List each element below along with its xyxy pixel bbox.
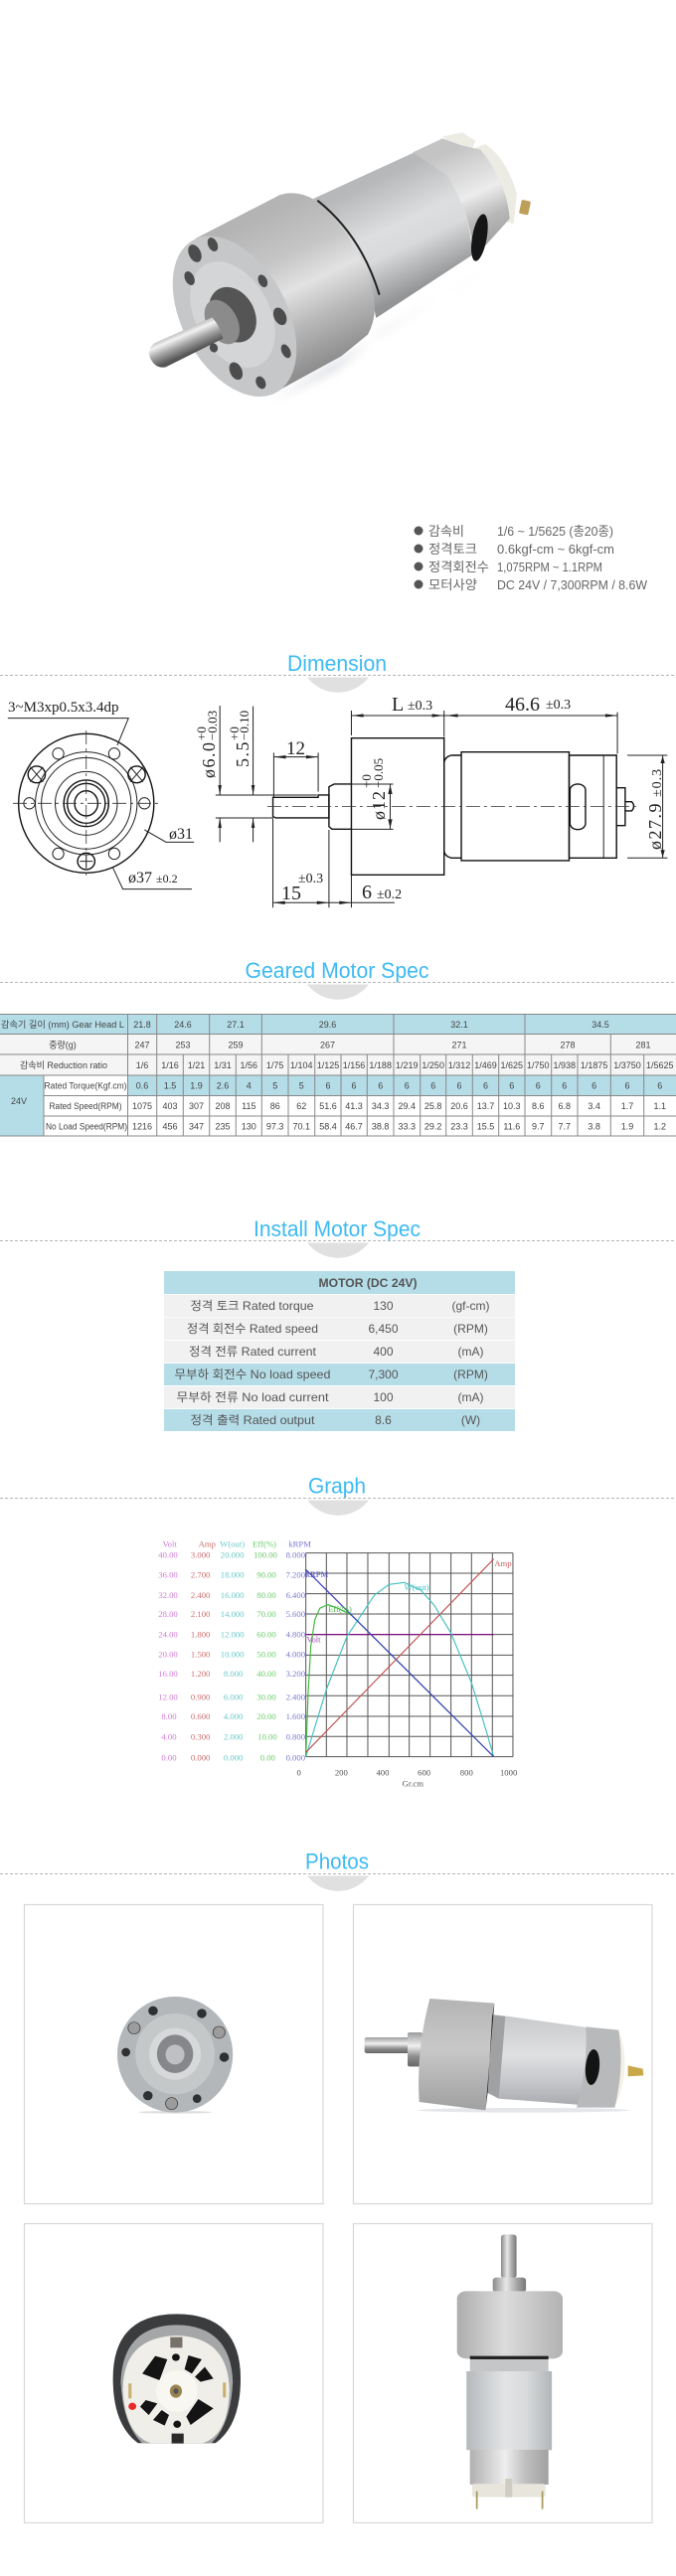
motor rear section	[413, 138, 510, 258]
row: rated torque: 6	[536, 1081, 541, 1091]
hero photo: geared motor	[147, 132, 531, 417]
front view labels	[8, 700, 193, 886]
row: reduction ratio: 1/188	[369, 1060, 392, 1070]
row: rated torque: 6	[657, 1081, 662, 1091]
axis column: Amp: 1.500	[191, 1649, 210, 1659]
curve labels: kRPM	[306, 1569, 329, 1579]
gearbox front face	[147, 215, 322, 417]
x axis labels: 200	[335, 1768, 348, 1778]
row: no load speed: 7.7	[559, 1121, 571, 1131]
side view labels	[194, 694, 665, 904]
row: no load speed: 38.8	[372, 1121, 389, 1131]
row: no load speed: 235	[215, 1121, 231, 1131]
row: reduction ratio: 1/104	[290, 1060, 313, 1070]
geared motor spec table	[0, 1014, 676, 1136]
feature labels: 모터사양	[428, 577, 477, 592]
row: rated speed: 403	[162, 1101, 178, 1111]
row: rated speed: 정격 회전수 Rated speed	[187, 1322, 318, 1336]
photo panel: vertical view	[354, 2224, 652, 2522]
curve labels: Volt	[306, 1634, 321, 1644]
row: weight: 271	[451, 1040, 467, 1049]
side view labels: ø27.9	[645, 802, 665, 850]
row: reduction ratio: 1/16	[161, 1060, 179, 1070]
plot grid	[306, 1553, 513, 1757]
row: no load current: 무부하 전류 No load current	[177, 1390, 329, 1404]
row: weight	[49, 1040, 651, 1049]
row: weight: 247	[134, 1040, 150, 1049]
motor side photo	[365, 1999, 643, 2113]
side view labels: +0	[359, 774, 374, 788]
dimension drawing: front view	[8, 700, 194, 889]
row: weight: 278	[560, 1040, 576, 1049]
row: no load speed: 58.4	[319, 1121, 337, 1131]
row: rated torque: 0.6	[136, 1081, 148, 1091]
gearbox cylinder	[196, 193, 375, 395]
row: no load speed: 29.2	[424, 1121, 441, 1131]
photo panel: rear view	[24, 2224, 323, 2522]
section heading: Photos: Photos	[305, 1849, 369, 1874]
feature values: DC 24V / 7,300RPM / 8.6W	[497, 577, 648, 592]
row: rated speed: 1075	[132, 1101, 152, 1111]
table grid	[0, 1014, 676, 1136]
row: reduction ratio: 1/625	[501, 1060, 523, 1070]
install motor spec table	[164, 1271, 515, 1431]
axis column: W(out): 16.000	[221, 1590, 245, 1600]
row: weight: 중량(g)	[49, 1040, 77, 1049]
axis column: Volt: 12.00	[158, 1692, 178, 1702]
axis column: Eff: Eff(%)	[253, 1539, 276, 1549]
row: gear head length: 29.6	[319, 1020, 336, 1030]
row: rated speed: 3.4	[588, 1101, 600, 1111]
axis column: Eff: 40.00	[256, 1669, 276, 1679]
row: gear head length	[1, 1019, 609, 1030]
axis column: Volt	[158, 1539, 178, 1762]
table header row	[164, 1271, 515, 1294]
curve labels: Amp	[494, 1558, 512, 1568]
axis column: Volt: 40.00	[158, 1550, 178, 1560]
row: no load speed: 15.5	[477, 1121, 494, 1131]
axis column: Volt: Volt	[163, 1539, 177, 1549]
front view labels: ø37 ±0.2	[128, 870, 178, 886]
axis column: Volt: 0.00	[161, 1752, 177, 1762]
collar	[197, 294, 247, 350]
row: rated speed: 307	[189, 1101, 204, 1111]
row: gear head length: 감속기 길이 (mm) Gear Head L	[1, 1019, 124, 1030]
row: rated torque: 5	[272, 1081, 277, 1091]
row: rated speed: 25.8	[424, 1101, 441, 1111]
row: rated torque: 6	[483, 1081, 488, 1091]
curve: Volt	[306, 1633, 494, 1636]
row: gear head length: 32.1	[450, 1020, 468, 1030]
side view labels: +0	[227, 726, 242, 740]
side view labels: +0	[194, 726, 209, 740]
section heading: Dimension: Dimension	[287, 651, 387, 676]
axis column: Eff: 60.00	[256, 1629, 276, 1639]
row: no load speed: 23.3	[450, 1121, 468, 1131]
curve labels: Eff(%)	[328, 1604, 352, 1614]
voltage cell: 24V	[11, 1096, 27, 1106]
row: no load speed: 1.2	[654, 1121, 666, 1131]
side view labels: 12	[286, 738, 305, 759]
front view labels: 3~M3xp0.5x3.4dp	[8, 700, 118, 716]
axis column: Amp: Amp	[199, 1539, 216, 1549]
row: no load speed: 3.8	[588, 1121, 600, 1131]
row: reduction ratio: 1/219	[396, 1060, 419, 1070]
axis column: Eff: 10.00	[257, 1731, 277, 1741]
row: no load speed: No Load Speed(RPM)	[46, 1121, 127, 1131]
bullets	[414, 527, 423, 588]
row: reduction ratio	[20, 1059, 674, 1070]
axis column: W(out): 20.000	[221, 1550, 245, 1560]
feature values	[497, 524, 648, 592]
face raised ring	[173, 246, 292, 383]
row: rated torque: (gf-cm)	[451, 1299, 489, 1313]
axis column: W(out): 14.000	[221, 1609, 245, 1619]
side view labels: −0.10	[237, 711, 252, 740]
row: rated torque: 6	[351, 1081, 357, 1091]
side view labels: L	[392, 694, 404, 716]
row: no load speed: 97.3	[266, 1121, 283, 1131]
x axis labels: Gr.cm	[403, 1778, 423, 1788]
axis column: kRPM: 5.600	[286, 1609, 305, 1619]
row: rated torque: 6	[405, 1081, 410, 1091]
row: weight: 253	[175, 1040, 191, 1049]
axis column: kRPM: 6.400	[286, 1590, 305, 1600]
performance graph	[158, 1539, 517, 1788]
axis column: Amp: 0.900	[191, 1692, 210, 1702]
axis column: kRPM: 0.800	[286, 1731, 305, 1741]
row: rated speed: 1.1	[654, 1101, 666, 1111]
motor vertical photo	[457, 2234, 563, 2509]
row: rated speed: 29.4	[399, 1101, 416, 1111]
axis column: Volt: 36.00	[158, 1570, 178, 1580]
table header row: MOTOR (DC 24V)	[318, 1276, 418, 1290]
row: rated output: 정격 출력 Rated output	[191, 1413, 315, 1427]
side view labels: ±0.3	[650, 768, 665, 797]
row: rated speed: 115	[242, 1101, 255, 1111]
row: reduction ratio: 1/5625	[646, 1060, 674, 1070]
row: rated torque: Rated Torque(Kgf.cm)	[44, 1081, 127, 1091]
curve labels: W(out)	[405, 1582, 429, 1592]
row: rated current: 정격 전류 Rated current	[189, 1345, 317, 1359]
row: rated speed: 6.8	[559, 1101, 571, 1111]
axis column: Volt: 8.00	[161, 1711, 177, 1721]
row: rated speed: 62	[296, 1101, 306, 1111]
axis column: W(out): 18.000	[221, 1570, 245, 1580]
row: rated output: (W)	[461, 1413, 480, 1427]
seam between gearbox and motor	[317, 201, 380, 295]
axis column: Eff: 50.00	[256, 1649, 276, 1659]
row: no load speed	[164, 1364, 515, 1385]
axis column: W(out): 8.000	[224, 1669, 243, 1679]
row: no load speed: 33.3	[399, 1121, 416, 1131]
row: no load speed	[46, 1121, 666, 1131]
axis column: Eff: 30.00	[256, 1692, 276, 1702]
axis column: W(out): 2.000	[224, 1731, 243, 1741]
axis column: Volt: 28.00	[158, 1609, 178, 1619]
axis column: Amp: 1.800	[191, 1629, 210, 1639]
feature values: 1,075RPM ~ 1.1RPM	[497, 560, 602, 574]
axis column: kRPM: 8.000	[286, 1550, 305, 1560]
row: rated torque	[44, 1081, 662, 1091]
table row fills	[0, 1015, 676, 1136]
section heading: Photos	[0, 1849, 676, 1891]
row: reduction ratio: 1/56	[241, 1060, 257, 1070]
side view labels: ø6.0	[199, 741, 219, 778]
row: rated torque: 1.9	[190, 1081, 203, 1091]
axis column: Amp: 0.300	[191, 1731, 210, 1741]
feature values: 1/6 ~ 1/5625 (총20종)	[497, 524, 613, 539]
section heading: Dimension	[0, 651, 676, 693]
curve: Eff	[306, 1605, 494, 1757]
axis column: Eff: 90.00	[256, 1570, 276, 1580]
shaft	[149, 317, 223, 368]
axis column: Amp: 2.100	[191, 1609, 210, 1619]
row: reduction ratio: 1/938	[554, 1060, 576, 1070]
feature labels: 정격회전수	[428, 560, 489, 574]
row: rated torque: 6	[430, 1081, 435, 1091]
axis column: Amp: 3.000	[191, 1550, 210, 1560]
section heading: Geared Motor Spec: Geared Motor Spec	[245, 958, 429, 983]
row: no load speed: (RPM)	[453, 1368, 488, 1381]
row: rated torque: 4	[247, 1081, 252, 1091]
row: rated speed: (RPM)	[453, 1322, 488, 1336]
side view labels: ±0.2	[377, 887, 402, 902]
side view labels: 5.5	[233, 740, 253, 767]
row: rated speed: 20.6	[450, 1101, 468, 1111]
axis column: W(out)	[220, 1539, 245, 1762]
row: rated speed: 6,450	[368, 1322, 399, 1336]
axis column: Amp: 1.200	[191, 1669, 210, 1679]
row: reduction ratio: 1/75	[266, 1060, 283, 1070]
gold terminal	[519, 200, 531, 215]
soft floor shadow	[271, 268, 490, 401]
section heading: Install Motor Spec: Install Motor Spec	[254, 1216, 421, 1241]
row: reduction ratio: 1/1875	[581, 1060, 607, 1070]
row: rated speed	[50, 1101, 666, 1111]
axis column: kRPM: 0.000	[286, 1752, 305, 1762]
row: rated torque: 6	[325, 1081, 331, 1091]
axis column: kRPM: 1.600	[286, 1711, 305, 1721]
row: no load speed: 347	[189, 1121, 204, 1131]
row: weight: 267	[320, 1040, 335, 1049]
row: rated torque: 6	[592, 1081, 596, 1091]
row: weight: 281	[635, 1040, 651, 1049]
side view labels: ±0.3	[546, 698, 571, 713]
x axis labels: 400	[376, 1768, 389, 1778]
row: rated torque: 2.6	[217, 1081, 229, 1091]
row: rated output: 8.6	[375, 1413, 392, 1427]
photo panel: front view	[24, 1904, 323, 2204]
row: reduction ratio: 1/125	[317, 1060, 339, 1070]
side view labels: −0.05	[371, 758, 386, 788]
axis column: W(out): 10.000	[221, 1649, 245, 1659]
axis column: Amp: 2.400	[191, 1590, 210, 1600]
row: rated current	[164, 1341, 515, 1363]
row: rated speed: 13.7	[477, 1101, 494, 1111]
axis column: kRPM: 2.400	[286, 1692, 305, 1702]
row: rated torque: 5	[299, 1081, 304, 1091]
section heading: Geared Motor Spec	[0, 958, 676, 1000]
row: rated speed: Rated Speed(RPM)	[50, 1101, 121, 1111]
row: rated output	[164, 1409, 515, 1431]
x axis labels: 600	[418, 1768, 430, 1778]
axis column: kRPM: kRPM	[288, 1539, 311, 1549]
row: reduction ratio: 감속비 Reduction ratio	[20, 1059, 107, 1070]
axis column: Eff: 0.00	[260, 1752, 275, 1762]
axis column: Amp	[191, 1539, 216, 1762]
row: rated current: 400	[373, 1345, 394, 1359]
row: no load speed: 7,300	[368, 1368, 399, 1381]
row: no load speed: 1216	[132, 1121, 152, 1131]
row: gear head length: 27.1	[227, 1020, 245, 1030]
row: rated speed: 34.3	[372, 1101, 389, 1111]
axis column: kRPM	[286, 1539, 311, 1762]
curve labels	[306, 1558, 512, 1644]
axis column: Amp: 2.700	[191, 1570, 210, 1580]
row: rated torque: 6	[456, 1081, 462, 1091]
row: rated speed: 41.3	[345, 1101, 363, 1111]
axis column: Volt: 32.00	[158, 1590, 178, 1600]
row: reduction ratio: 1/250	[422, 1060, 444, 1070]
axis column: Eff: 100.00	[254, 1550, 277, 1560]
axis column: W(out): 4.000	[224, 1711, 243, 1721]
dimension drawing: side view	[194, 694, 667, 907]
row: rated speed: 86	[270, 1101, 280, 1111]
axis column: kRPM: 4.800	[286, 1629, 305, 1639]
axis column: W(out): 0.000	[224, 1752, 243, 1762]
section heading: Graph	[0, 1473, 676, 1516]
axis column: W(out): 12.000	[221, 1629, 245, 1639]
row: no load speed: 11.6	[503, 1121, 520, 1131]
side view labels: 46.6	[505, 694, 540, 716]
row: rated torque: 1.5	[164, 1081, 176, 1091]
curve: kRPM	[306, 1569, 494, 1757]
row: gear head length: 34.5	[592, 1020, 609, 1030]
row: gear head length: 21.8	[133, 1020, 151, 1030]
side view labels: 15	[281, 883, 301, 904]
row: no load speed: 130	[242, 1121, 256, 1131]
axis column: Volt: 16.00	[158, 1669, 178, 1679]
feature list	[414, 524, 648, 592]
row: reduction ratio: 1/156	[343, 1060, 365, 1070]
row: no load current	[164, 1386, 515, 1408]
axis column: kRPM: 3.200	[286, 1669, 305, 1679]
flange front photo	[117, 1997, 233, 2114]
motor body cylinder	[313, 152, 472, 318]
axis column: Volt: 20.00	[158, 1649, 178, 1659]
motor ventilation slot	[468, 213, 491, 262]
row: reduction ratio: 1/21	[188, 1060, 205, 1070]
row: no load current: 100	[373, 1390, 394, 1404]
x axis labels	[296, 1768, 517, 1788]
row: rated speed: 10.3	[503, 1101, 521, 1111]
row: rated speed: 8.6	[532, 1101, 545, 1111]
row: weight: 259	[228, 1040, 244, 1049]
axis column: Eff	[253, 1539, 277, 1762]
curve: W(out)	[306, 1582, 494, 1757]
side view labels: ±0.3	[298, 872, 323, 886]
x axis labels: 800	[460, 1768, 473, 1778]
row: reduction ratio: 1/6	[136, 1060, 148, 1070]
side view labels: −0.03	[205, 711, 220, 740]
feature values: 0.6kgf-cm ~ 6kgf-cm	[497, 542, 614, 557]
row: no load speed: 1.9	[621, 1121, 633, 1131]
side view labels: ø12	[369, 790, 389, 820]
axis column: Volt: 4.00	[161, 1731, 177, 1741]
feature labels: 감속비	[428, 524, 464, 539]
section heading: Install Motor Spec	[0, 1216, 676, 1258]
axis column: Amp: 0.600	[191, 1711, 210, 1721]
row: no load current: (mA)	[457, 1390, 483, 1404]
hub	[200, 278, 265, 351]
feature labels	[428, 524, 489, 592]
x axis labels: 1000	[500, 1768, 517, 1778]
row: rated torque: 6	[378, 1081, 383, 1091]
axis column: Volt: 24.00	[158, 1629, 178, 1639]
row: no load speed: 70.1	[293, 1121, 310, 1131]
axis column: Eff: 20.00	[256, 1711, 276, 1721]
motor rear white end cap	[442, 132, 517, 224]
side view labels: 6	[362, 882, 372, 903]
axis column: W(out): W(out)	[220, 1539, 245, 1549]
row: reduction ratio: 1/750	[527, 1060, 550, 1070]
row: reduction ratio: 1/469	[474, 1060, 497, 1070]
row: no load speed: 456	[162, 1121, 178, 1131]
side view labels: ±0.3	[408, 699, 432, 714]
row: reduction ratio: 1/31	[214, 1060, 232, 1070]
row: rated torque: 130	[373, 1299, 394, 1313]
axis column: kRPM: 4.000	[286, 1649, 305, 1659]
row: no load speed: 무부하 회전수 No load speed	[175, 1368, 330, 1381]
row: rated torque	[164, 1295, 515, 1317]
row: reduction ratio: 1/312	[448, 1060, 470, 1070]
row: rated torque: 6	[509, 1081, 514, 1091]
axis column: kRPM: 7.200	[286, 1570, 305, 1580]
photo panel: side view	[354, 1904, 652, 2204]
section heading: Graph: Graph	[308, 1473, 366, 1499]
x axis labels: 0	[296, 1768, 301, 1778]
row: rated current: (mA)	[457, 1345, 483, 1359]
row: rated speed	[164, 1318, 515, 1340]
row: rated speed: 51.6	[319, 1101, 337, 1111]
axis column: Eff: 80.00	[256, 1590, 276, 1600]
row: no load speed: 9.7	[532, 1121, 545, 1131]
axis column: Eff: 70.00	[256, 1609, 276, 1619]
row: no load speed: 46.7	[345, 1121, 363, 1131]
motor rear photo	[113, 2314, 241, 2444]
row: rated torque: 6	[562, 1081, 567, 1091]
row: reduction ratio: 1/3750	[613, 1060, 641, 1070]
row: rated torque: 정격 토크 Rated torque	[191, 1299, 314, 1313]
front view labels: ø31	[169, 826, 193, 843]
axis column: W(out): 6.000	[224, 1692, 243, 1702]
axis column: Amp: 0.000	[191, 1752, 210, 1762]
row: rated speed: 1.7	[621, 1101, 633, 1111]
row: gear head length: 24.6	[174, 1020, 192, 1030]
row: rated speed: 208	[215, 1101, 231, 1111]
row: rated torque: 6	[624, 1081, 630, 1091]
feature labels: 정격토크	[428, 542, 477, 557]
face mounting holes	[182, 236, 293, 391]
curve: Amp	[306, 1559, 494, 1752]
